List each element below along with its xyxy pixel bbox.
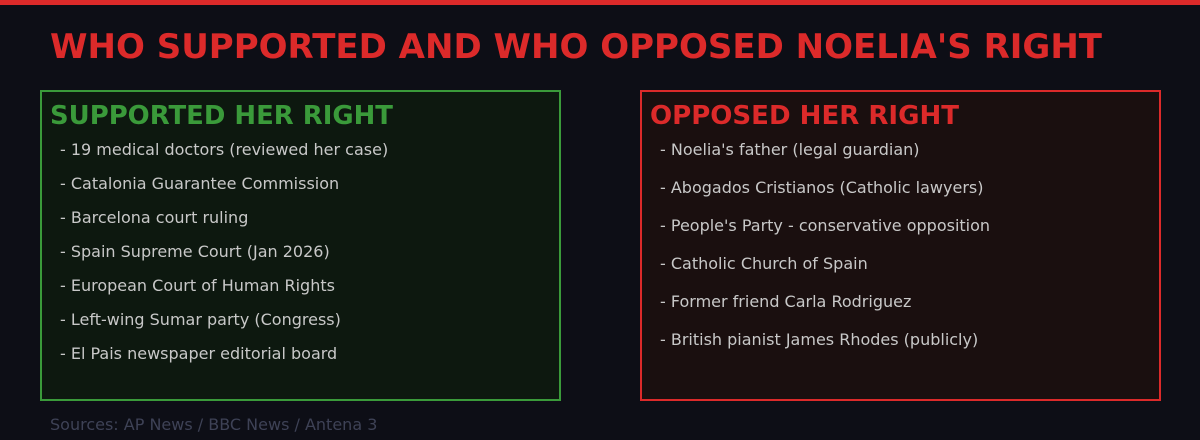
list: opponents: - Former friend Carla Rodriguez	[660, 292, 911, 311]
list: supporters	[60, 140, 388, 363]
list: opponents: - People's Party - conservative opposition	[660, 216, 990, 235]
panel: opposed	[641, 91, 1160, 400]
heading: supported: SUPPORTED HER RIGHT	[50, 101, 393, 131]
title: WHO SUPPORTED AND WHO OPPOSED NOELIA'S RIGHT	[50, 27, 1103, 67]
heading: opposed: OPPOSED HER RIGHT	[650, 101, 959, 131]
list: supporters: - European Court of Human Rights	[60, 276, 335, 295]
list: supporters: - El Pais newspaper editorial board	[60, 344, 337, 363]
list: opponents: - Catholic Church of Spain	[660, 254, 868, 273]
sources: Sources: AP News / BBC News / Antena 3	[50, 415, 377, 434]
list: supporters: - Spain Supreme Court (Jan 2026)	[60, 242, 330, 261]
top bar	[0, 0, 1200, 5]
list: opponents: - British pianist James Rhodes (publicly)	[660, 330, 978, 349]
list: supporters: - Catalonia Guarantee Commission	[60, 174, 339, 193]
list: supporters: - Left-wing Sumar party (Congress)	[60, 310, 341, 329]
list: supporters: - 19 medical doctors (reviewed her case)	[60, 140, 388, 159]
list: opponents: - Abogados Cristianos (Catholic lawyers)	[660, 178, 983, 197]
panel: supported	[41, 91, 560, 400]
list: supporters: - Barcelona court ruling	[60, 208, 248, 227]
list: opponents: - Noelia's father (legal guardian)	[660, 140, 920, 159]
list: opponents	[660, 140, 990, 349]
